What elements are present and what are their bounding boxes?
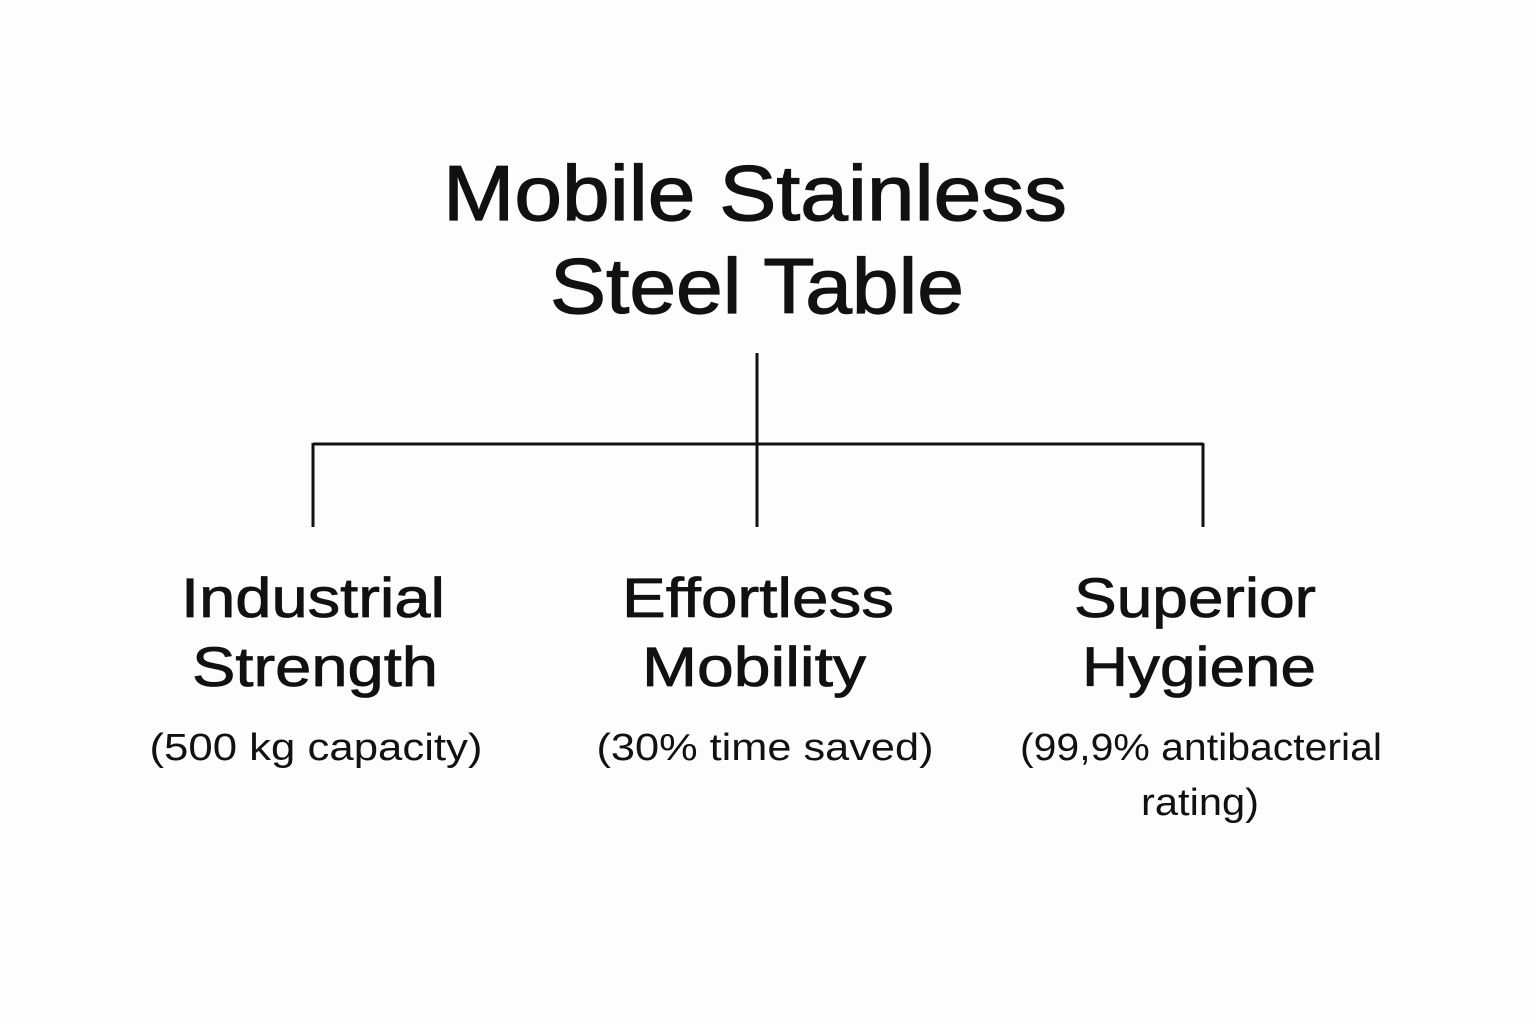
branch: Industrial Strength: Industrial <box>181 566 445 629</box>
branch: Industrial Strength <box>150 566 482 769</box>
title: Steel Table <box>550 242 964 330</box>
branch: Effortless Mobility: Mobility <box>642 635 866 698</box>
branch: Effortless Mobility: Effortless <box>622 566 894 629</box>
branch: Superior Hygiene: (99,9% antibacterial <box>1020 727 1382 769</box>
title: Mobile Stainless <box>443 149 1067 237</box>
branch: Effortless Mobility: (30% time saved) <box>596 727 934 769</box>
branch: Superior Hygiene: Superior <box>1074 566 1316 629</box>
branch: Superior Hygiene <box>1020 566 1382 824</box>
branch: Superior Hygiene: rating) <box>1141 782 1259 824</box>
branch: Effortless Mobility <box>596 566 934 769</box>
branch: Industrial Strength: Strength <box>192 635 438 698</box>
branch: Industrial Strength: (500 kg capacity) <box>150 727 482 769</box>
branch: Superior Hygiene: Hygiene <box>1082 635 1316 698</box>
tree connector lines <box>313 353 1203 527</box>
title <box>443 149 1067 330</box>
